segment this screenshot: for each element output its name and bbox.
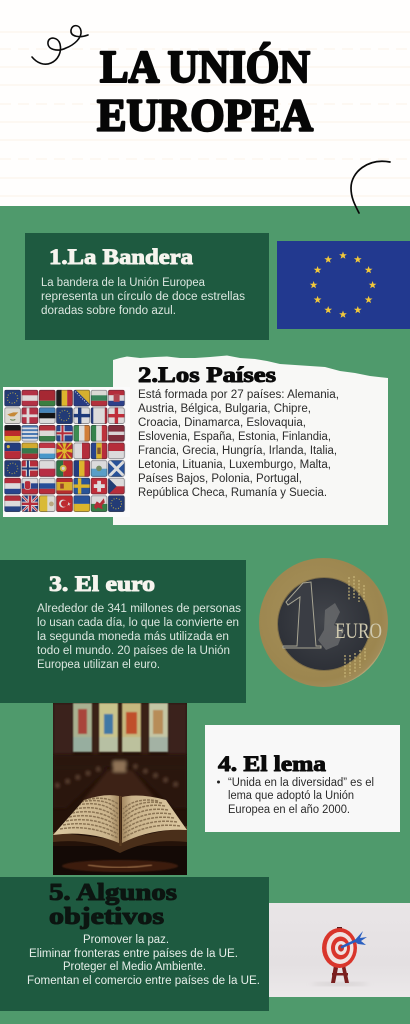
text: objectives list — [27, 934, 260, 987]
text: objectives list: Eliminar fronteras entre países de la UE. — [29, 948, 238, 960]
icon: euro coin: EURO — [335, 618, 382, 643]
heading: algunos objetivos: objetivos — [49, 904, 164, 930]
text: el euro description — [37, 603, 241, 671]
text: el euro description: la segunda moneda más utilizada en — [37, 631, 229, 643]
text: list of countries: Países Bajos, Polonia, Portugal, — [138, 473, 302, 485]
heading: los paises: 2.Los Países — [138, 362, 277, 387]
text: list of countries: Está formada por 27 países: Alemania, — [138, 389, 339, 401]
heading: algunos objetivos — [49, 880, 177, 930]
church pews — [53, 755, 187, 808]
heading: algunos objetivos: 5. Algunos — [49, 880, 177, 906]
page background green — [0, 206, 410, 1024]
text: el euro description: lo usan cada día, lo que la convierte en — [37, 617, 239, 629]
text: el lema description — [228, 777, 374, 816]
panel: el lema — [205, 725, 400, 832]
title: LA UNIÓN — [100, 41, 310, 92]
row 5 — [4, 460, 21, 477]
photo: open book in church — [53, 703, 187, 875]
row 2 — [4, 407, 21, 424]
row 4 — [4, 443, 21, 460]
header background with ruled lines — [0, 0, 410, 206]
panel: el euro — [0, 560, 246, 703]
decoration: arc — [351, 161, 390, 213]
text: list of countries: Letonia, Lituania, Luxemburgo, Malta, — [138, 459, 331, 471]
text: el euro description: Alrededor de 341 millones de personas — [37, 603, 241, 615]
text: el euro description: todo el mundo. 20 países de la Unión — [37, 645, 230, 657]
row 6 — [4, 478, 21, 495]
heading: el euro: 3. El euro — [49, 571, 155, 596]
text: la bandera description: representa un círculo de doce estrellas — [41, 291, 245, 303]
text: list of countries: República Checa, Rumanía y Suecia. — [138, 487, 327, 499]
icon: EU flag — [277, 241, 410, 329]
text: objectives list: Proteger el Medio Ambiente. — [63, 961, 206, 973]
text: list of countries: Eslovenia, España, Estonia, Finlandia, — [138, 431, 331, 443]
text: la bandera description — [41, 277, 245, 317]
pulpit under the book — [53, 846, 187, 875]
heading: la bandera: 1.La Bandera — [49, 244, 193, 269]
text: list of countries: Francia, Grecia, Hungría, Irlanda, Italia, — [138, 445, 337, 457]
text: el lema description: Europea en el año 2000. — [228, 804, 350, 816]
panel: los paises torn paper — [113, 356, 388, 525]
heading: el lema: 4. El lema — [218, 751, 326, 776]
title — [97, 41, 313, 140]
text: la bandera description: La bandera de la Unión Europea — [41, 277, 206, 289]
panel: la bandera — [25, 233, 269, 340]
text: list of countries: Croacia, Dinamarca, Eslovaquia, — [138, 417, 306, 429]
text: el lema description: “Unida en la diversidad” es el — [228, 777, 374, 789]
text: el lema description: lema que adoptó la Unión — [228, 790, 354, 802]
decoration: curly squiggle — [32, 26, 88, 64]
panel: algunos objetivos — [0, 877, 269, 1011]
open book — [53, 795, 187, 853]
text: objectives list: Promover la paz. — [83, 934, 169, 946]
text: la bandera description: doradas sobre fondo azul. — [41, 305, 176, 317]
text: objectives list: Fomentan el comercio entre países de la UE. — [27, 975, 260, 987]
row 1 — [4, 390, 21, 407]
icon: euro coin — [259, 558, 388, 687]
text: list of countries — [138, 389, 339, 499]
bullet — [217, 780, 220, 784]
title: EUROPEA — [97, 90, 313, 140]
text: list of countries: Austria, Bélgica, Bulgaria, Chipre, — [138, 403, 311, 415]
text: el euro description: Europea utilizan el euro. — [37, 659, 160, 671]
icon: grid of flags — [3, 387, 130, 517]
row 7 — [4, 495, 21, 512]
photo: target with dart — [269, 903, 410, 997]
row 3 — [4, 425, 21, 442]
church wall and pillars — [53, 703, 187, 755]
stained glass windows — [73, 703, 168, 752]
